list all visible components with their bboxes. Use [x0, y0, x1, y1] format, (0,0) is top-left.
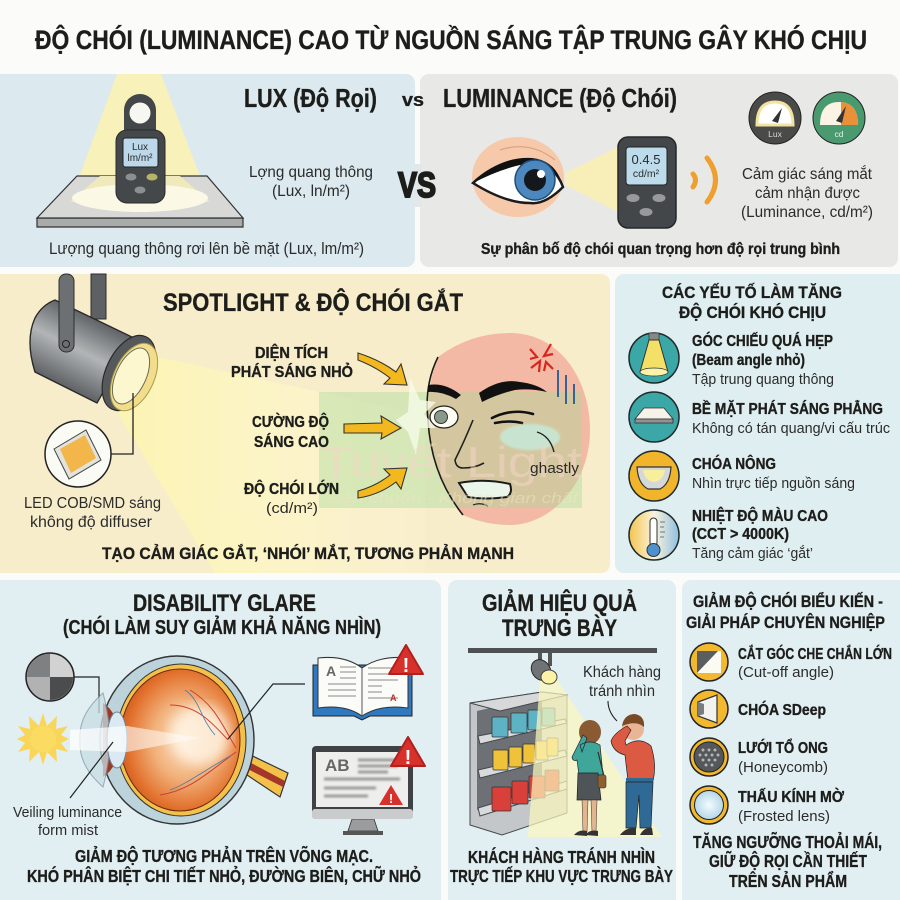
light beam	[118, 357, 425, 573]
icon: open book with alert: !	[403, 655, 409, 677]
label: high intensity: CƯỜNG ĐỘ	[252, 412, 329, 431]
heading: factors: ĐỘ CHÓI KHÓ CHỊU	[679, 303, 826, 322]
heading: vs small: vs	[402, 90, 424, 110]
label: customers avoid looking: tránh nhìn	[589, 683, 655, 700]
leader: retina to book	[228, 684, 305, 739]
solution: frosted lens: (Frosted lens)	[738, 808, 830, 825]
label: high luminance: (cd/m²)	[266, 500, 318, 517]
factor: high colour temperature: NHIỆT ĐỘ MÀU CAO	[692, 507, 828, 525]
heading: disability glare: DISABILITY GLARE	[133, 590, 316, 617]
leader: customers	[608, 701, 617, 721]
illustration: shelves	[470, 692, 567, 835]
icon: monitor with alert	[312, 737, 425, 835]
icon: flat panel	[629, 392, 679, 442]
icon: frosted lens	[690, 786, 728, 824]
heading: disability glare	[63, 590, 381, 639]
factor: high colour temperature: Tăng cảm giác ‘gắt’	[692, 545, 813, 562]
label: veiling luminance: form mist	[38, 823, 98, 839]
icon: anger mark	[530, 344, 553, 372]
icon: monitor with alert: !	[389, 791, 393, 806]
icon: cd gauge	[813, 92, 865, 144]
solution: frosted lens: THẤU KÍNH MỜ	[738, 788, 845, 806]
panel: professional solutions	[682, 580, 900, 900]
products: bottom row	[492, 770, 559, 811]
factor: shallow reflector: Nhìn trực tiếp nguồn sáng	[692, 475, 855, 492]
factor: flat surface	[629, 392, 890, 442]
heading: factors	[662, 282, 842, 322]
label: high intensity	[252, 412, 329, 451]
figure: woman	[572, 720, 606, 836]
factor: narrow beam: (Beam angle nhỏ)	[692, 352, 805, 369]
caption: lux: Lượng quang thông rơi lên bề mặt (Lux, lm/m²)	[49, 240, 364, 258]
icon: lux gauge: Lux	[768, 129, 783, 139]
label: small emitting area: PHÁT SÁNG NHỎ	[231, 362, 353, 381]
icon: track spotlight	[527, 653, 557, 684]
label: customers avoid looking: Khách hàng	[583, 664, 661, 681]
arrow 3	[358, 468, 407, 498]
flash star	[396, 378, 436, 455]
solution: honeycomb	[690, 738, 828, 776]
icon: narrow beam	[629, 333, 679, 383]
watermark text	[320, 438, 582, 507]
factor: narrow beam: Tập trung quang thông	[692, 371, 834, 388]
factor: shallow reflector: CHÓA NÔNG	[692, 455, 776, 473]
caption: harsh feeling: TẠO CẢM GIÁC GẮT, ‘NHÓI’ MẮT, TƯƠNG PHẢN MẠNH	[102, 544, 514, 563]
solution: honeycomb: (Honeycomb)	[738, 759, 828, 776]
label: small emitting area: DIỆN TÍCH	[255, 343, 328, 362]
heading: display	[482, 588, 637, 642]
caption: display: KHÁCH HÀNG TRÁNH NHÌN	[468, 846, 655, 867]
illustration: angry face	[319, 333, 590, 525]
caption: disability glare: KHÓ PHÂN BIỆT CHI TIẾT NHỎ, ĐƯỜNG BIÊN, CHỮ NHỎ	[27, 865, 421, 886]
heading: lux: LUX (Độ Rọi)	[244, 83, 377, 113]
icon: signal waves	[693, 158, 716, 202]
panel background	[0, 274, 610, 573]
panel: lux vs luminance	[0, 74, 898, 267]
icon: open book with alert	[313, 645, 423, 720]
label: small emitting area	[231, 343, 353, 381]
caption: luminance: Sự phân bố độ chói quan trọng hơn độ rọi trung bình	[481, 241, 840, 258]
icon: contrast disc	[26, 653, 74, 701]
panel: spotlight and harsh glare	[0, 274, 610, 573]
solution: deep reflector	[690, 690, 826, 728]
factor: high colour temperature	[629, 507, 828, 562]
label: led chip	[24, 495, 161, 531]
icon: shallow reflector	[629, 451, 679, 501]
illustration: eye cross-section	[70, 656, 288, 824]
label: veiling luminance: Veiling luminance	[13, 805, 122, 821]
heading: solutions	[686, 592, 885, 632]
panel: factors increasing discomfort glare	[615, 274, 900, 573]
icon: cut-off	[690, 643, 728, 681]
illustration: lux meter on surface: Lux	[132, 142, 148, 153]
vs bridge	[414, 164, 422, 207]
icon: led chip	[45, 421, 111, 487]
watermark box	[319, 392, 582, 508]
icon: lux gauge	[749, 92, 801, 144]
label: ghastly: ghastly	[530, 460, 580, 477]
label: high intensity: SÁNG CAO	[254, 432, 329, 451]
watermark text: Đèn chuẩn - Không gian chất	[328, 490, 579, 507]
solution: deep reflector: CHÓA SDeep	[738, 701, 826, 719]
light beam	[528, 680, 662, 837]
solution: cut-off angle	[690, 643, 892, 681]
solution: frosted lens	[690, 786, 845, 825]
arrow 2	[344, 416, 401, 439]
retinal haze	[170, 705, 230, 765]
panel background	[615, 274, 900, 573]
caption: display	[450, 846, 673, 886]
illustration: luminance meter: cd/m²	[633, 168, 660, 180]
products: middle row	[493, 738, 558, 770]
label: led chip: LED COB/SMD sáng	[24, 495, 161, 512]
factor: shallow reflector	[629, 451, 855, 501]
panel: reduced display effectiveness	[448, 580, 676, 900]
panel: disability glare	[0, 580, 441, 900]
caption: solutions: TRÊN SẢN PHẨM	[729, 870, 847, 891]
icon: thermometer	[629, 510, 679, 560]
text: perceived brightness	[741, 164, 873, 221]
leader: veiling luminance	[70, 742, 113, 798]
icon: cd gauge: cd	[835, 129, 844, 139]
factor: narrow beam: GÓC CHIẾU QUÁ HẸP	[692, 332, 833, 350]
label: high luminance	[244, 479, 339, 517]
icon: open book with alert: A	[390, 693, 397, 703]
illustration: spotlight fixture	[30, 274, 167, 419]
heading: display: TRƯNG BÀY	[502, 614, 617, 642]
panel background	[0, 580, 441, 900]
products: top row	[492, 708, 555, 737]
solution: cut-off angle: (Cut-off angle)	[738, 664, 834, 681]
icon: open book with alert: A	[326, 663, 336, 679]
illustration: lux meter on surface	[37, 74, 243, 227]
caption: disability glare: GIẢM ĐỘ TƯƠNG PHẢN TRÊN VÕNG MẠC.	[75, 845, 373, 866]
icon: sun	[17, 713, 69, 765]
factor: flat surface: Không có tán quang/vi cấu trúc	[692, 420, 890, 437]
illustration: eye	[472, 137, 564, 217]
factor: narrow beam	[629, 332, 834, 388]
figure: man	[611, 714, 655, 835]
leader: contrast disc	[74, 677, 99, 713]
panel background: luminance	[420, 74, 898, 267]
label: high luminance: ĐỘ CHÓI LỚN	[244, 479, 339, 498]
illustration: lux meter on surface: lm/m²	[128, 153, 153, 164]
icon: monitor with alert: AB	[325, 756, 350, 775]
label: veiling luminance	[13, 805, 122, 839]
text: perceived brightness: cảm nhận được	[755, 185, 860, 202]
heading: VS large: VS	[398, 166, 436, 205]
caption: display: TRỰC TIẾP KHU VỰC TRƯNG BÀY	[450, 865, 673, 886]
text: lux flux label: Lợng quang thông	[249, 164, 373, 181]
caption: solutions	[693, 831, 882, 891]
text: perceived brightness: (Luminance, cd/m²)	[741, 204, 873, 221]
panel background	[682, 580, 900, 900]
icon: honeycomb	[690, 738, 728, 776]
illustration: luminance meter	[618, 137, 676, 228]
label: customers avoid looking	[583, 664, 661, 700]
panel background	[448, 580, 676, 900]
heading: disability glare: (CHÓI LÀM SUY GIẢM KHẢ NĂNG NHÌN)	[63, 615, 381, 639]
illustration: luminance meter: 0.4.5	[632, 152, 660, 167]
heading: luminance: LUMINANCE (Độ Chói)	[443, 83, 677, 113]
panel background: lux	[0, 74, 415, 267]
heading: spotlight: SPOTLIGHT & ĐỘ CHÓI GẮT	[163, 287, 463, 317]
caption: disability glare	[27, 845, 421, 886]
icon: deep reflector	[690, 690, 728, 728]
connector: led chip	[111, 393, 133, 454]
factor: high colour temperature: (CCT > 4000K)	[692, 526, 789, 543]
label: led chip: không độ diffuser	[30, 514, 152, 531]
icon: stress lines	[558, 370, 574, 404]
arrow 1	[358, 353, 407, 385]
light beam to meter	[565, 147, 618, 212]
heading: factors: CÁC YẾU TỐ LÀM TĂNG	[662, 282, 842, 302]
solution: honeycomb: LƯỚI TỔ ONG	[738, 739, 828, 757]
teal glow	[500, 424, 560, 450]
text: perceived brightness: Cảm giác sáng mắt	[742, 164, 873, 183]
heading: display: GIẢM HIỆU QUẢ	[482, 588, 637, 617]
text: lux flux label	[249, 164, 373, 200]
track rail	[468, 648, 657, 653]
watermark text: Tuyết Light	[320, 438, 582, 487]
icon: monitor with alert: !	[405, 747, 411, 769]
text: lux flux label: (Lux, ln/m²)	[272, 183, 350, 200]
